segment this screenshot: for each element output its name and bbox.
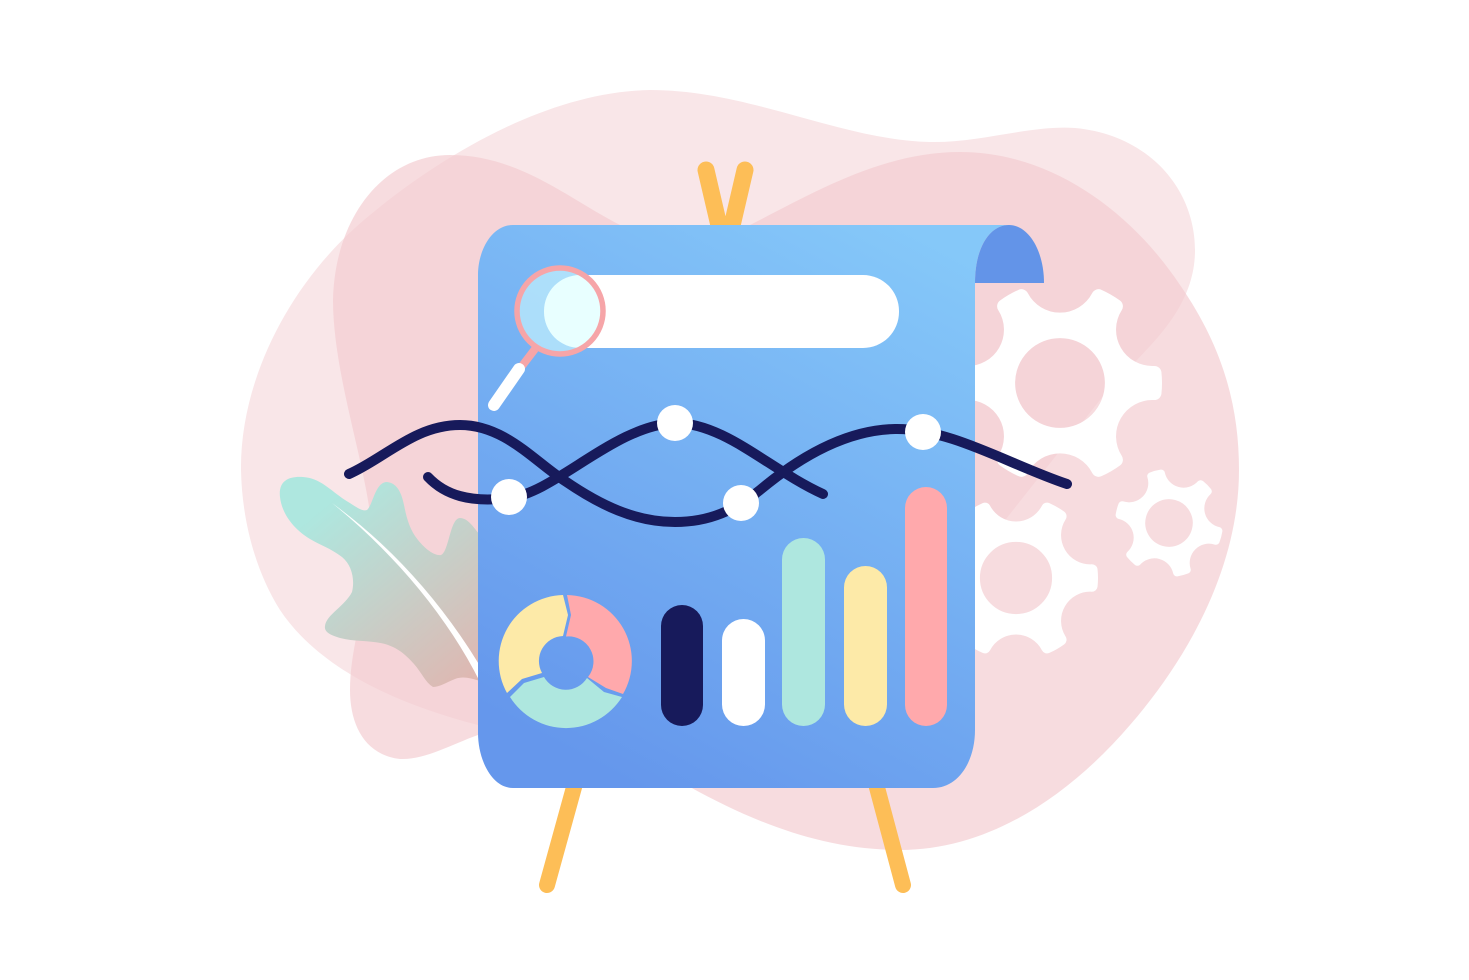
donut: pink segment: [566, 595, 632, 694]
line chart: wave B: [428, 423, 823, 499]
leaf vein: [332, 503, 480, 682]
easel: left leg: [547, 780, 576, 885]
gear: small: [1109, 466, 1229, 580]
easel: top prongs: [706, 170, 745, 230]
background blob: deeper pink: [333, 152, 1239, 850]
background blob: light pink: [241, 90, 1195, 780]
line chart: data points: [491, 405, 941, 521]
donut: yellow segment: [499, 595, 568, 693]
panel: board sheet: [478, 225, 1009, 788]
gear: lower: [940, 508, 1092, 648]
icon: magnifying glass: [494, 268, 603, 405]
line chart: wave A: [349, 425, 1067, 522]
search bar: [544, 275, 899, 348]
bar chart: [661, 487, 947, 726]
easel: right leg: [875, 780, 903, 885]
donut chart: [499, 595, 632, 728]
gear: large: [965, 296, 1155, 470]
donut: mint segment: [510, 677, 622, 728]
leaf: [280, 477, 480, 687]
sheet curl: [975, 225, 1044, 283]
